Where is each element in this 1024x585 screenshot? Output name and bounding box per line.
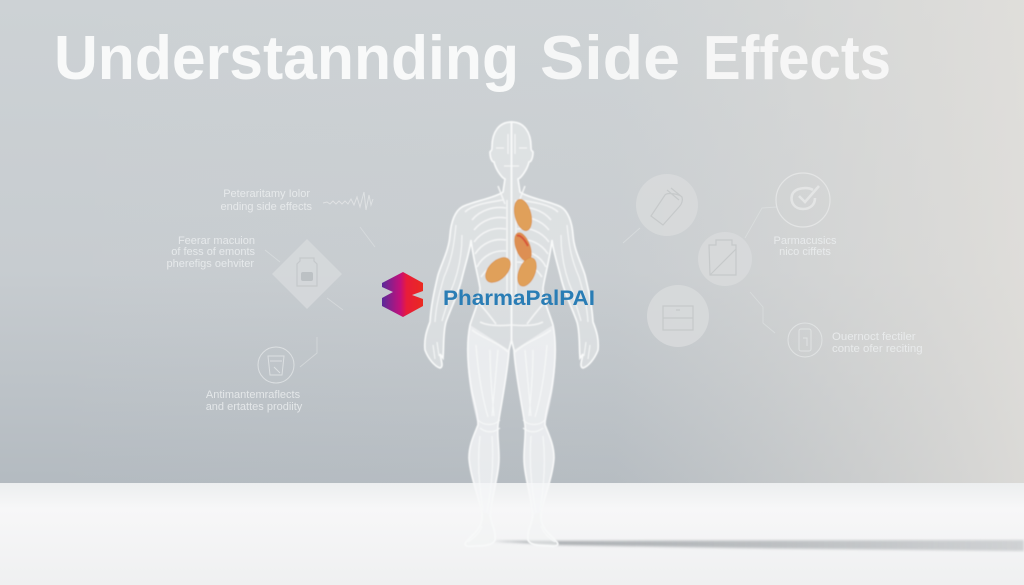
title: Understannding — [54, 24, 519, 93]
text: left middle: of fess of emonts — [171, 246, 255, 258]
icon: phone circle — [788, 323, 822, 357]
icon: box circle — [647, 285, 709, 347]
text: right top: Parmacusics — [774, 235, 837, 247]
floor shadow — [490, 540, 1024, 551]
logo wordmark: PharmaPalPAI — [443, 287, 595, 310]
logo icon — [382, 272, 423, 317]
text: right top — [774, 235, 837, 258]
text: left top — [220, 188, 312, 213]
text: left top: ending side effects — [220, 201, 312, 213]
title: Side — [540, 24, 680, 93]
text: left bottom — [206, 389, 303, 413]
text: right bottom: Ouernoct fectiler — [832, 331, 916, 343]
body right half — [512, 122, 598, 546]
icon: left lower circle — [258, 347, 294, 383]
connector lines — [265, 207, 777, 367]
text: right bottom: conte ofer reciting — [832, 343, 923, 355]
text: left middle: pherefigs oehviter — [167, 258, 254, 270]
text: left top: Peteraritamy Iolor — [223, 188, 310, 200]
text: right top: nico ciffets — [779, 246, 831, 258]
icon: diamond with jar — [272, 239, 342, 309]
icon: check circle — [776, 173, 830, 227]
text: left middle — [167, 235, 255, 270]
text: left bottom: Antimantemraflects — [206, 389, 301, 401]
text: left bottom: and ertattes prodiity — [206, 401, 303, 413]
icon: waveform — [323, 192, 373, 210]
title: Effects — [703, 24, 891, 93]
text: left middle: Feerar macuion — [178, 235, 255, 247]
body left half — [425, 122, 512, 546]
icon: bottle circle — [698, 232, 752, 286]
human body figure — [425, 122, 598, 546]
organs — [481, 198, 540, 289]
icon: glove circle — [636, 174, 698, 236]
floor — [0, 483, 1024, 585]
title — [54, 24, 891, 93]
text: right bottom — [832, 331, 923, 355]
